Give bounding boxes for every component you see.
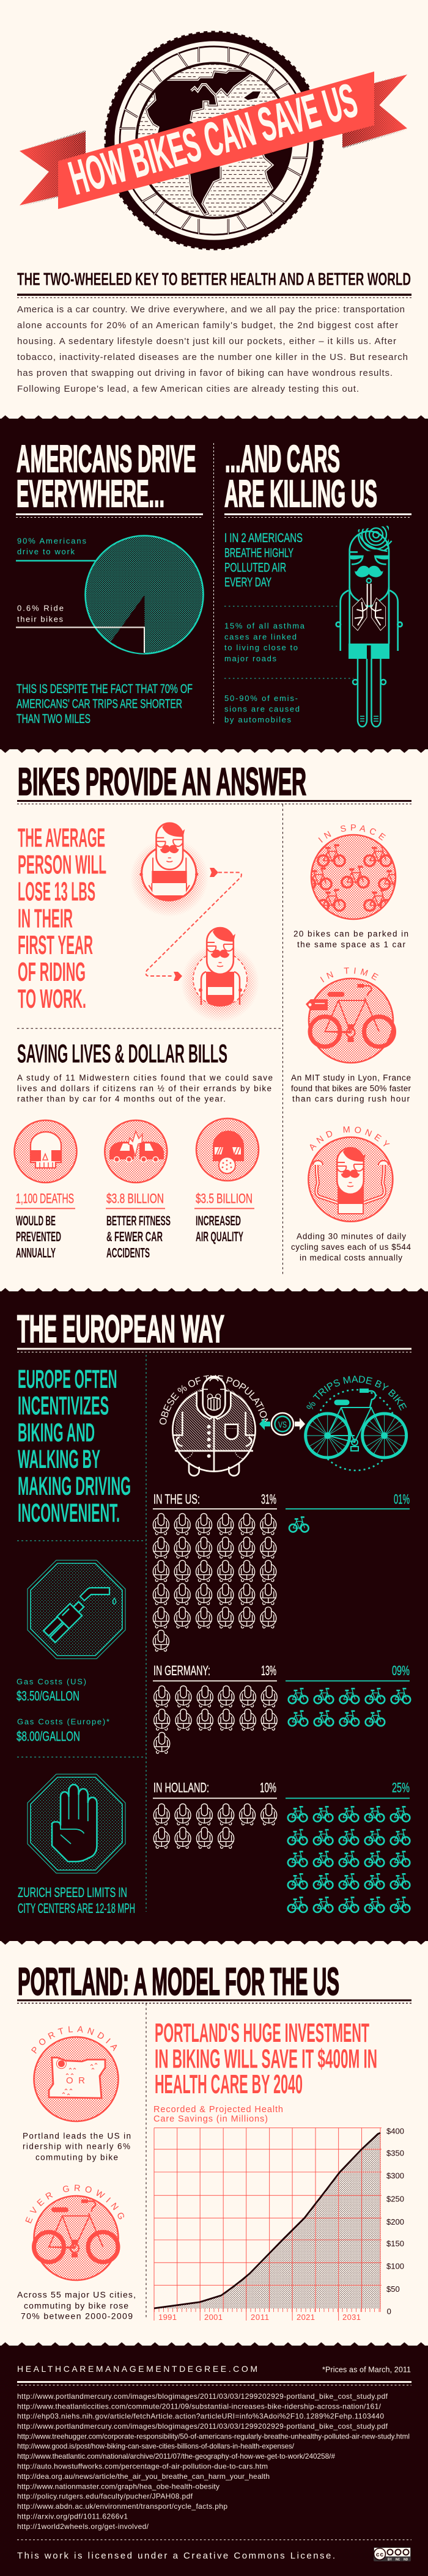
column dividers <box>17 804 282 1274</box>
heading: and cars are killing us <box>224 438 377 515</box>
icon: obese man: OBESE % OF THE POPULATION <box>160 1375 268 1425</box>
stat: $3.5 billion: INCREASED <box>196 1213 241 1228</box>
chart: holland: 10% <box>260 1780 276 1796</box>
text: bikes in space: 20 bikes can be parked in <box>293 930 408 939</box>
badge: in space: IN SPACE <box>318 824 386 843</box>
header wheel and globe <box>106 32 322 249</box>
heading rule <box>17 800 411 804</box>
icon: versus badge <box>259 1413 305 1435</box>
text: portland ridership: ridership with nearly 6% <box>23 2142 130 2151</box>
chart: united states <box>153 1492 410 1651</box>
text: bikes in time: found that bikes are 50% faster <box>291 1084 411 1093</box>
text: across 55 cities <box>17 2289 136 2321</box>
subtitle rule <box>17 293 411 298</box>
source list <box>17 2392 410 2531</box>
badge: portlandia: PORTLANDIA <box>31 2026 117 2053</box>
stat: $3.5 billion <box>194 1118 259 1244</box>
chart y axis labels: $250 <box>386 2195 404 2204</box>
chart: united states: 01% <box>394 1492 410 1507</box>
heading: portland investment <box>155 2018 377 2099</box>
stat: 1,100 deaths: WOULD BE <box>16 1213 56 1228</box>
source list: http://www.portlandmercury.com/images/blogimages/2011/03/03/1299202929-portland_bike_cost_study.pdf <box>17 2422 388 2431</box>
badge: ever growing <box>25 2184 124 2281</box>
icon: obese man <box>160 1375 268 1477</box>
callout: polluted air: EVERY DAY <box>224 576 271 590</box>
callout: lose 13 lbs <box>18 823 106 1014</box>
text: across 55 cities: 70% between 2000-2009 <box>21 2311 133 2321</box>
gas costs: $8.00/GALLON <box>17 1729 80 1744</box>
text: portland ridership <box>23 2131 131 2162</box>
chart y axis labels: $100 <box>386 2262 404 2271</box>
study paragraph <box>17 1073 273 1104</box>
chart title <box>153 2105 283 2124</box>
source list: http://www.portlandmercury.com/images/blogimages/2011/03/03/1299202929-portland_bike_cost_study.pdf <box>17 2392 388 2401</box>
zurich speed limits: ZURICH SPEED LIMITS IN <box>18 1885 127 1900</box>
text: portland ridership: commuting by bike <box>35 2152 118 2162</box>
badge: ever growing: EVER GROWING <box>25 2184 124 2223</box>
chart: holland: 25% <box>392 1780 410 1796</box>
intro paragraph: has proven that swapping out driving in favor of biking can have wondrous results. <box>17 368 393 378</box>
pie label 0.6% <box>17 604 64 623</box>
stat: 1,100 deaths: PREVENTED <box>16 1229 61 1244</box>
chart y axis labels: $300 <box>386 2171 404 2180</box>
stat: $3.8 billion: BETTER FITNESS <box>106 1213 171 1228</box>
chart y axis labels: $200 <box>386 2217 404 2226</box>
stat: $3.8 billion: ACCIDENTS <box>106 1245 150 1260</box>
column divider <box>146 2003 147 2319</box>
callout: short trips: THAN TWO MILES <box>17 712 90 726</box>
callout: polluted air: POLLUTED AIR <box>224 561 286 575</box>
chart: holland: IN HOLLAND: <box>153 1780 209 1796</box>
stat: $3.5 billion: AIR QUALITY <box>196 1229 243 1244</box>
source list: http://1world2wheels.org/get-involved/ <box>17 2522 149 2531</box>
callout: short trips <box>17 682 193 726</box>
callout: polluted air: BREATHE HIGHLY <box>224 546 293 560</box>
callout: europe incentivizes: EUROPE OFTEN <box>18 1365 117 1394</box>
heading rule <box>17 2000 411 2003</box>
icon: creative commons badge: BY <box>388 2558 393 2562</box>
callout: short trips: THIS IS DESPITE THE FACT THAT 70% OF <box>17 682 193 696</box>
study paragraph: rather than by car for 4 months out of the year. <box>17 1095 226 1104</box>
chart y axis labels: $400 <box>386 2127 404 2136</box>
asthma stat: 15% of all asthma <box>224 622 305 631</box>
stat: $3.8 billion: $3.8 BILLION <box>106 1191 164 1206</box>
badge: in time: IN TIME <box>320 967 378 983</box>
study paragraph: lives and dollars if citizens ran ½ of their errands by bike <box>17 1084 271 1093</box>
emissions stat: sions are caused <box>224 705 300 714</box>
callout: short trips: AMERICANS' CAR TRIPS ARE SHORTER <box>17 697 182 711</box>
stat: 1,100 deaths: 1,100 DEATHS <box>16 1191 74 1206</box>
source list: http://www.treehugger.com/corporate-responsibility/50-of-americans-regularly-breathe-unhealthy-polluted-air-new-study.html <box>17 2432 410 2440</box>
stat: $3.8 billion <box>105 1120 171 1260</box>
chart: germany <box>153 1663 410 1753</box>
chart y axis labels: 0 <box>387 2307 391 2316</box>
pie label 0.6%: their bikes <box>17 615 64 623</box>
heading: americans drive everywhere: AMERICANS DRIVE <box>17 438 196 480</box>
intro paragraph: housing. A sedentary lifestyle doesn't just kill our pockets, either – it kills us. After <box>17 336 396 347</box>
chart y axis labels <box>386 2127 404 2316</box>
text: portland ridership: Portland leads the US in <box>23 2131 131 2140</box>
callout: europe incentivizes: INCONVENIENT. <box>18 1499 120 1528</box>
heading: saving lives: SAVING LIVES & DOLLAR BILLS <box>17 1039 227 1068</box>
callout: lose 13 lbs: TO WORK. <box>18 984 86 1014</box>
icon: gas nozzle sign <box>28 1560 125 1659</box>
chart x axis labels: 2001 <box>204 2313 223 2322</box>
source list: http://arxiv.org/pdf/1011.6266v1 <box>17 2512 128 2521</box>
badge: portlandia: OR <box>66 2075 85 2086</box>
emissions stat <box>224 694 300 724</box>
footer site name: HEALTHCAREMANAGEMENTDEGREE.COM <box>17 2364 257 2374</box>
footnote: *Prices as of March, 2011 <box>322 2365 411 2374</box>
icon: creative commons badge <box>374 2547 411 2562</box>
icon: big teal bike <box>304 1376 408 1472</box>
chart x axis labels: 2021 <box>297 2313 315 2322</box>
intro paragraph: alone accounts for 20% of an American family's budget, the 2nd biggest cost after <box>17 320 398 331</box>
source list: http://www.theatlantic.com/national/archive/2011/07/the-geography-of-how-we-get-to-work/240258/# <box>17 2452 335 2460</box>
source list: http://policy.rutgers.edu/faculty/pucher/JPAH08.pdf <box>17 2492 193 2501</box>
icon: versus badge: VS <box>278 1420 287 1430</box>
heading rule <box>17 1348 411 1352</box>
text: and money: cycling saves each of us $544 <box>291 1242 411 1252</box>
heading: the european way: THE EUROPEAN WAY <box>17 1308 224 1351</box>
study paragraph: A study of 11 Midwestern cities found that we could save <box>17 1073 273 1082</box>
stat: $3.8 billion: & FEWER CAR <box>106 1229 163 1244</box>
callout: lose 13 lbs: FIRST YEAR <box>18 930 93 960</box>
asthma stat: to living close to <box>224 643 298 652</box>
license line: This work is licensed under a Creative Commons License. <box>17 2551 335 2561</box>
pie label 90%: drive to work <box>17 547 75 556</box>
title ribbon <box>18 72 408 209</box>
chart: holland <box>153 1780 410 1912</box>
chart title: Care Savings (in Millions) <box>153 2115 268 2124</box>
callout: europe incentivizes: WALKING BY <box>18 1445 100 1474</box>
zurich speed limits: CITY CENTERS ARE 12-18 MPH <box>18 1901 135 1916</box>
intro paragraph: Following Europe's lead, a few American cities are already testing this out. <box>17 384 359 394</box>
gas costs <box>17 1677 109 1744</box>
text: across 55 cities: commuting by bike rose <box>24 2300 128 2310</box>
intro paragraph: America is a car country. We drive everywhere, and we all pay the price: transportation <box>17 304 405 315</box>
chart x axis labels <box>158 2313 361 2322</box>
panel: the european way <box>0 1288 428 1945</box>
text: bikes in time: than cars during rush hour <box>292 1095 410 1104</box>
text: PERSON WILL <box>18 849 106 879</box>
heading: americans drive everywhere: EVERYWHERE... <box>17 473 164 515</box>
pie label 90% <box>17 537 87 556</box>
pie chart <box>16 535 203 654</box>
chart x axis labels: 2031 <box>342 2313 361 2322</box>
source list: http://www.abdn.ac.uk/environment/transport/cycle_facts.php <box>17 2502 227 2511</box>
source list: http://ehp03.niehs.nih.gov/article/fetchArticle.action?articleURI=info%3Adoi%2F10.1289%2Fehp.1103440 <box>17 2412 384 2421</box>
callout: europe incentivizes: BIKING AND <box>18 1418 95 1448</box>
source list: http://auto.howstuffworks.com/percentage-of-air-pollution-due-to-cars.htm <box>17 2462 268 2471</box>
icon: creative commons badge: NC <box>396 2558 400 2562</box>
dashed arrow path <box>146 868 242 981</box>
callout: lose 13 lbs: LOSE 13 LBS <box>18 876 95 906</box>
emissions stat: by automobiles <box>224 715 291 724</box>
text: bikes in time <box>291 1073 411 1104</box>
callout: lose 13 lbs: OF RIDING <box>18 957 86 987</box>
badge: in time <box>306 967 396 1063</box>
badge: in space <box>311 824 396 920</box>
icon: man with lungs <box>336 517 402 727</box>
line chart: health care savings <box>154 2127 404 2322</box>
icon: thin man <box>181 928 259 1022</box>
asthma stat: major roads <box>224 654 276 663</box>
text: bikes in space <box>293 930 408 949</box>
dividers <box>17 1355 146 1912</box>
icon: stop hand sign <box>28 1774 125 1873</box>
intro paragraph <box>17 304 408 394</box>
stat: $3.5 billion: $3.5 BILLION <box>196 1191 253 1206</box>
text: and money: in medical costs annually <box>300 1253 402 1263</box>
icon: creative commons badge: cc <box>376 2552 383 2558</box>
chart: germany: IN GERMANY: <box>153 1663 210 1678</box>
source list: http://dea.org.au/news/article/the_air_you_breathe_can_harm_your_health <box>17 2472 270 2481</box>
callout: polluted air <box>224 531 303 590</box>
chart: germany: 13% <box>261 1663 276 1678</box>
gas costs: $3.50/GALLON <box>17 1689 79 1704</box>
callout: polluted air: I IN 2 AMERICANS <box>224 531 303 545</box>
asthma stat <box>224 622 305 663</box>
callout: lose 13 lbs: IN THEIR <box>18 903 73 933</box>
chart x axis labels: 2011 <box>251 2313 269 2322</box>
text: and money <box>291 1232 411 1263</box>
text: bikes in space: the same space as 1 car <box>297 940 406 949</box>
text: bikes in time: An MIT study in Lyon, France <box>291 1073 411 1082</box>
emissions stat: 50-90% of emis- <box>224 694 298 703</box>
source list: http://www.nationmaster.com/graph/hea_obe-health-obesity <box>17 2482 220 2490</box>
intro paragraph: tobacco, inactivity-related diseases are the number one killer in the US. But research <box>17 352 408 362</box>
source list: http://www.good.is/post/how-biking-can-save-cities-billions-of-dollars-in-health-expenses/ <box>17 2442 295 2451</box>
badge: and money: AND MONEY <box>309 1126 390 1151</box>
gas costs: Gas Costs (Europe)* <box>17 1717 109 1727</box>
callout: europe incentivizes: INCENTIVIZES <box>18 1392 109 1421</box>
icon: creative commons badge: ND <box>404 2558 408 2562</box>
heading: americans drive everywhere <box>17 438 196 515</box>
footer rule <box>17 2381 411 2540</box>
asthma stat: cases are linked <box>224 632 297 641</box>
leader lines <box>224 606 353 678</box>
chart y axis labels: $150 <box>386 2239 404 2248</box>
footer panel <box>0 2342 428 2576</box>
pie label 90%: 90% Americans <box>17 537 87 546</box>
badge: portlandia <box>31 2026 119 2122</box>
chart title: Recorded & Projected Health <box>153 2105 283 2115</box>
heading rules <box>16 513 411 517</box>
icon: big teal bike: % TRIPS MADE BY BIKE <box>306 1376 407 1411</box>
text: and money: Adding 30 minutes of daily <box>297 1232 406 1241</box>
pie label 0.6%: 0.6% Ride <box>17 604 64 613</box>
text: THE AVERAGE <box>18 823 105 853</box>
text: across 55 cities: Across 55 major US cities, <box>17 2289 136 2299</box>
chart y axis labels: $350 <box>386 2148 404 2157</box>
zurich speed limits <box>18 1885 135 1916</box>
chart: united states: 31% <box>261 1492 276 1507</box>
source list: http://www.theatlanticcities.com/commute/2011/09/substantial-increases-bike-ridership-across-nation/161/ <box>17 2402 382 2410</box>
chart x axis labels: 1991 <box>158 2313 177 2322</box>
chart: germany: 09% <box>392 1663 410 1678</box>
chart y axis labels: $50 <box>386 2284 400 2294</box>
icon: fat man <box>130 823 213 917</box>
panel: americans drive / cars killing us <box>0 416 428 753</box>
callout: europe incentivizes: MAKING DRIVING <box>18 1472 131 1501</box>
stat: 1,100 deaths <box>15 1120 77 1260</box>
callout: europe incentivizes <box>18 1365 131 1528</box>
stat: 1,100 deaths: ANNUALLY <box>16 1245 56 1260</box>
gas costs: Gas Costs (US) <box>17 1677 86 1686</box>
chart: united states: IN THE US: <box>153 1492 200 1507</box>
badge: and money <box>308 1126 394 1222</box>
